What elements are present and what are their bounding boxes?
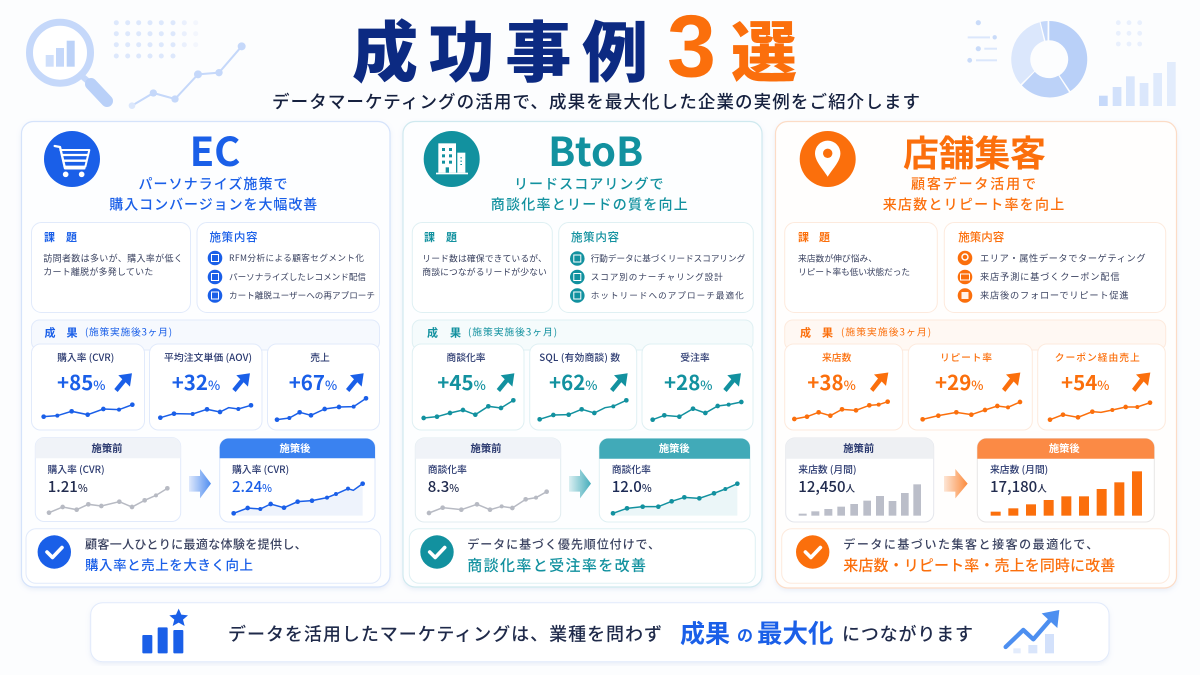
card: measures bbox=[197, 222, 380, 312]
results header: (施策実施後3ヶ月) bbox=[85, 324, 172, 338]
card: before: 8.3% bbox=[428, 476, 459, 497]
card: after: 17,180人 bbox=[990, 476, 1047, 497]
kpi card: visits: +38% bbox=[807, 366, 856, 396]
card: measures: ホットリードへのアプローチ最適化 bbox=[591, 290, 744, 302]
arrow: before to after bbox=[189, 469, 211, 498]
kpi card: win rate bbox=[642, 344, 753, 430]
callout: store conclusion: 来店数・リピート率・売上を同時に改善 bbox=[843, 554, 1115, 576]
card: measures: 施策内容 bbox=[210, 229, 258, 245]
callout: store conclusion bbox=[782, 529, 1169, 583]
subheading: store: 顧客データ活用で bbox=[911, 174, 1036, 194]
results header bbox=[785, 320, 1166, 350]
decoration: line chart left bbox=[129, 42, 246, 109]
footer banner bbox=[91, 603, 1109, 662]
kpi card: coupon sales: +54% bbox=[1061, 366, 1110, 396]
subheading: BtoB: リードスコアリングで bbox=[514, 174, 664, 194]
card: before bbox=[35, 438, 181, 522]
subheading: EC: 購入コンバージョンを大幅改善 bbox=[109, 194, 317, 214]
card: after: 施策後 bbox=[280, 440, 311, 455]
callout: EC conclusion: 顧客一人ひとりに最適な体験を提供し、 bbox=[85, 536, 307, 552]
card: measures: カート離脱ユーザーへの再アプローチ bbox=[229, 290, 375, 302]
card: after bbox=[599, 438, 750, 522]
card: before: 1.21% bbox=[48, 476, 88, 497]
subheading: EC: パーソナライズ施策で bbox=[138, 174, 288, 194]
subheading: BtoB bbox=[491, 174, 688, 214]
kpi card: conversion: +45% bbox=[437, 366, 486, 396]
title bbox=[352, 0, 797, 96]
card: measures: 来店後のフォローでリピート促進 bbox=[980, 288, 1128, 302]
arrow: before to after bbox=[569, 469, 591, 498]
card: challenge: 課 題 bbox=[798, 229, 830, 245]
results header: (施策実施後3ヶ月) bbox=[841, 324, 931, 338]
kpi card: AOV: 平均注文単価 (AOV) bbox=[164, 350, 252, 364]
card: challenge: リード数は確保できているが、 bbox=[422, 251, 547, 264]
kpi card: visits bbox=[785, 344, 903, 430]
footer text: データを活用したマーケティングは、業種を問わず bbox=[228, 620, 662, 646]
card: after: 商談化率 bbox=[612, 462, 651, 476]
card: before: 商談化率 bbox=[428, 462, 467, 476]
card: after bbox=[977, 438, 1154, 522]
card: before bbox=[786, 438, 934, 522]
card: measures: エリア・属性データでターゲティング bbox=[980, 250, 1146, 264]
card: before: 施策前 bbox=[843, 440, 874, 455]
heading: BtoB: BtoB bbox=[548, 120, 643, 178]
card: before: 12,450人 bbox=[798, 476, 856, 497]
subheading: store: 来店数とリピート率を向上 bbox=[883, 194, 1064, 214]
decoration: donut chart bbox=[1011, 21, 1087, 97]
kpi card: conversion: 商談化率 bbox=[446, 350, 486, 364]
card: after: 施策後 bbox=[659, 440, 690, 455]
kpi card: CVR: +85% bbox=[57, 366, 106, 396]
kpi card: CVR: 購入率 (CVR) bbox=[57, 350, 114, 364]
callout: EC conclusion: 購入率と売上を大きく向上 bbox=[85, 554, 253, 574]
kpi card: SQL: +62% bbox=[549, 366, 598, 396]
card: before: 購入率 (CVR) bbox=[48, 462, 105, 476]
footer text bbox=[228, 614, 973, 650]
card: after: 購入率 (CVR) bbox=[232, 462, 289, 476]
card: measures: 施策内容 bbox=[571, 229, 620, 245]
card: challenge bbox=[785, 222, 937, 312]
panel: BtoB bbox=[403, 120, 762, 587]
card: after bbox=[220, 438, 375, 522]
card: after: 来店数 (月間) bbox=[990, 462, 1048, 476]
icon: shopping cart bbox=[44, 131, 100, 187]
card: measures: 行動データに基づくリードスコアリング bbox=[591, 252, 746, 264]
panel: store bbox=[776, 122, 1176, 588]
decoration: list lines bbox=[967, 20, 997, 63]
card: challenge: リピート率も低い状態だった bbox=[798, 265, 910, 278]
results header bbox=[32, 320, 380, 350]
card: before: 施策前 bbox=[92, 440, 122, 455]
card: challenge bbox=[412, 222, 552, 312]
icon: rising arrow bbox=[1006, 610, 1059, 653]
card: measures: パーソナライズしたレコメンド配信 bbox=[229, 271, 366, 283]
subheading: store bbox=[883, 174, 1064, 214]
card: after: 12.0% bbox=[612, 476, 652, 497]
kpi card: sales: 売上 bbox=[310, 350, 330, 364]
panel: EC bbox=[22, 120, 390, 587]
subtitle: データマーケティングの活用で、成果を最大化した企業の実例をご紹介します bbox=[272, 89, 920, 114]
kpi card: conversion bbox=[412, 344, 524, 430]
results header: 成 果 bbox=[800, 324, 833, 340]
results header: (施策実施後3ヶ月) bbox=[468, 324, 557, 338]
icon: building bbox=[424, 131, 480, 187]
kpi card: repeat rate: リピート率 bbox=[940, 350, 992, 364]
kpi card: SQL bbox=[530, 344, 637, 430]
card: after: 施策後 bbox=[1049, 440, 1080, 455]
kpi card: sales: +67% bbox=[289, 366, 337, 396]
kpi card: AOV: +32% bbox=[172, 366, 220, 396]
kpi card: coupon sales: クーポン経由売上 bbox=[1055, 350, 1140, 364]
icon: bars with star bbox=[142, 609, 188, 653]
decoration: dot grid right bbox=[1116, 20, 1142, 46]
title: 成功事例 bbox=[352, 0, 648, 96]
kpi card: visits: 来店数 bbox=[822, 350, 852, 364]
card: measures: 施策内容 bbox=[958, 229, 1005, 245]
callout: BtoB conclusion: データに基づく優先順位付けで、 bbox=[467, 536, 660, 552]
results header bbox=[412, 320, 753, 350]
subheading: BtoB: 商談化率とリードの質を向上 bbox=[491, 194, 688, 214]
kpi card: repeat rate bbox=[908, 344, 1032, 430]
kpi card: SQL: SQL (有効商談) 数 bbox=[539, 350, 620, 364]
card: after: 2.24% bbox=[232, 476, 272, 497]
card: before bbox=[415, 438, 561, 522]
results header: 成 果 bbox=[44, 324, 78, 340]
decoration: dot grid left bbox=[114, 20, 198, 58]
kpi card: CVR bbox=[32, 344, 144, 430]
callout: BtoB conclusion: 商談化率と受注率を改善 bbox=[467, 554, 646, 576]
kpi card: coupon sales bbox=[1038, 344, 1165, 430]
callout: store conclusion: データに基づいた集客と接客の最適化で、 bbox=[843, 536, 1098, 552]
callout: EC conclusion bbox=[26, 529, 381, 583]
kpi card: repeat rate: +29% bbox=[935, 366, 984, 396]
callout: BtoB conclusion bbox=[409, 529, 755, 583]
card: measures: RFM分析による顧客セグメント化 bbox=[229, 252, 364, 264]
card: measures: スコア別のナーチャリング設計 bbox=[591, 271, 723, 283]
card: challenge: 来店数が伸び悩み、 bbox=[798, 251, 877, 264]
icon: map pin bbox=[800, 131, 856, 187]
card: challenge: 商談につながるリードが少ない bbox=[422, 265, 547, 278]
heading: EC: EC bbox=[190, 120, 240, 178]
kpi card: win rate: 受注率 bbox=[680, 350, 710, 364]
results header: 成 果 bbox=[427, 324, 461, 340]
card: before: 来店数 (月間) bbox=[798, 462, 856, 476]
card: measures: 来店予測に基づくクーポン配信 bbox=[980, 269, 1120, 283]
card: challenge: 訪問者数は多いが、購入率が低く bbox=[43, 251, 183, 264]
card: challenge: 課 題 bbox=[424, 229, 457, 245]
card: challenge bbox=[32, 222, 190, 312]
footer text: の bbox=[737, 622, 753, 646]
card: before: 施策前 bbox=[471, 440, 501, 455]
card: challenge: 課 題 bbox=[44, 229, 77, 245]
decoration: magnifier with bars bbox=[30, 22, 107, 101]
heading: store: 店舗集客 bbox=[903, 125, 1046, 177]
footer text: 成果 bbox=[680, 614, 730, 650]
kpi card: sales bbox=[268, 344, 380, 430]
subheading: EC bbox=[109, 174, 317, 214]
footer text: 最大化 bbox=[757, 614, 834, 650]
arrow: before to after bbox=[944, 469, 968, 498]
kpi card: win rate: +28% bbox=[664, 366, 713, 396]
footer text: につながります bbox=[842, 620, 973, 646]
decoration: bar chart right bbox=[1099, 62, 1176, 106]
title: 選 bbox=[731, 0, 797, 96]
card: measures bbox=[944, 222, 1166, 312]
card: measures bbox=[559, 222, 753, 312]
card: challenge: カート離脱が多発していた bbox=[43, 265, 153, 278]
kpi card: AOV bbox=[150, 344, 262, 430]
